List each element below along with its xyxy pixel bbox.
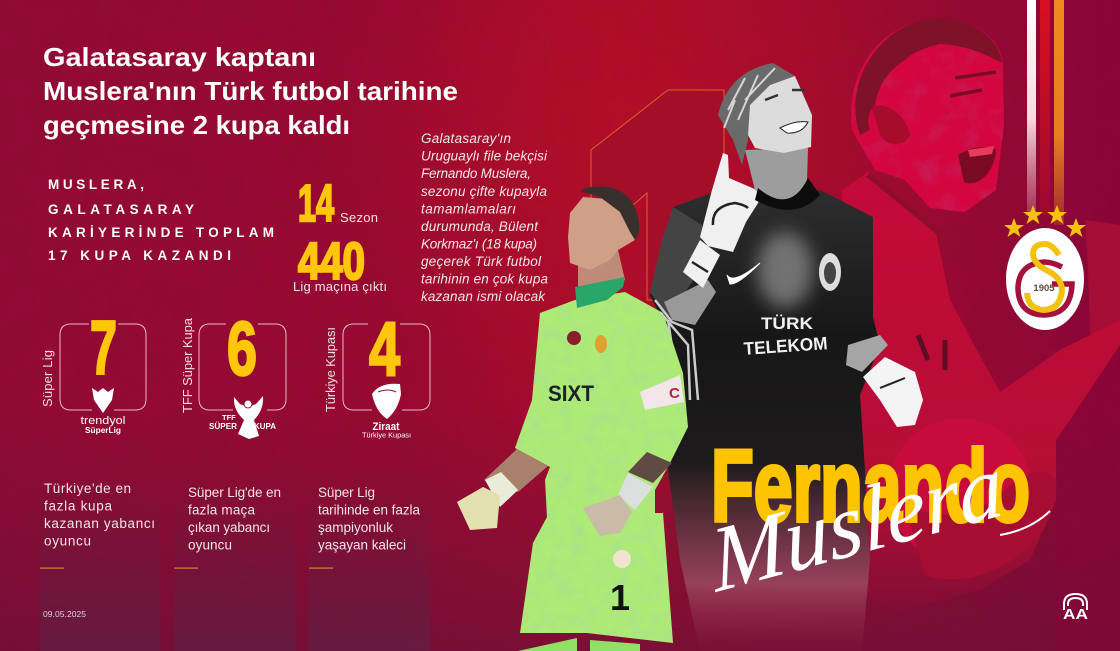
description: most championships: yaşayan kaleci <box>318 538 406 552</box>
collar <box>755 178 820 210</box>
description: most championships: şampiyonluk <box>318 520 393 535</box>
number 1: 1 <box>610 577 630 618</box>
description: most appearances: oyuncu <box>188 538 232 552</box>
crests <box>567 331 581 345</box>
hair highlights <box>724 68 775 128</box>
shirt marks <box>918 335 945 370</box>
black and white player <box>650 63 923 651</box>
description: most championships <box>318 485 420 552</box>
club crest on shirt <box>819 253 841 291</box>
galatasaray crest: 1905 <box>1033 283 1055 294</box>
description: most trophies <box>44 481 155 548</box>
galatasaray crest <box>1004 205 1086 330</box>
title: Muslera'nın Türk futbol tarihine <box>43 76 458 106</box>
hair <box>855 19 1002 135</box>
green player: C <box>669 385 680 402</box>
fist behind <box>1085 220 1120 335</box>
card: TFF Süper Kupa <box>180 307 286 439</box>
raised glove <box>683 153 760 288</box>
subheading: GALATASARAY <box>48 202 194 217</box>
smile <box>780 122 808 133</box>
intro paragraph: durumunda, Bülent <box>421 219 539 234</box>
right glove <box>583 495 632 536</box>
AA logo <box>1063 594 1088 623</box>
neck <box>745 148 808 205</box>
description: most trophies: oyuncu <box>44 534 91 548</box>
card: TFF Süper Kupa: TFF Süper Kupa <box>180 317 195 413</box>
left fist <box>457 487 500 530</box>
torso and arm <box>842 172 1120 610</box>
card: Süper Lig: 7 <box>90 306 117 391</box>
intro paragraph: tamamlamaları <box>421 202 516 216</box>
description: most trophies: Türkiye'de en <box>44 481 131 496</box>
intro paragraph: kazanan ismi olacak <box>421 289 546 304</box>
intro paragraph: Galatasaray'ın <box>421 131 511 146</box>
face <box>748 76 812 153</box>
logo: tff süper kupa: SÜPER <box>209 422 237 431</box>
card: Süper Lig: Süper Lig <box>40 350 55 407</box>
open mouth <box>958 147 996 183</box>
card: Türkiye Kupası: Türkiye Kupası <box>323 327 338 412</box>
AA logo: AA <box>1063 606 1088 623</box>
description: most trophies: kazanan yabancı <box>44 516 155 531</box>
stat: 14 seasons: Sezon <box>340 210 378 225</box>
logo: ziraat türkiye kupası: Türkiye Kupası <box>362 430 411 440</box>
neck <box>578 250 625 292</box>
subheading: 17 KUPA KAZANDI <box>48 248 231 263</box>
head shading <box>854 26 1003 211</box>
face <box>568 197 635 270</box>
kit <box>515 292 688 643</box>
sponsor: TELEKOM <box>743 333 828 359</box>
collar <box>575 277 625 308</box>
stat: 440 league matches: 440 <box>298 233 365 291</box>
intro paragraph: Korkmaz'ı (18 kupa) <box>421 236 537 252</box>
eyes <box>765 90 805 100</box>
stat: 14 seasons: 14 <box>298 175 334 233</box>
subheading: KARİYERİNDE TOPLAM <box>48 225 274 240</box>
glove detail <box>692 203 748 272</box>
left sleeve <box>650 207 702 318</box>
chest highlight <box>757 232 813 308</box>
green player <box>457 186 690 651</box>
intro paragraph <box>421 131 548 304</box>
stat: 440 league matches: Lig maçına çıktı <box>293 279 387 294</box>
captain armband <box>640 375 684 410</box>
ear <box>872 106 910 144</box>
description: most appearances: Süper Lig'de en <box>188 485 281 500</box>
description: most championships: Süper Lig <box>318 485 375 500</box>
subheading <box>48 177 274 263</box>
description: most appearances: fazla maça <box>188 502 255 518</box>
kit pattern <box>516 300 686 642</box>
ball <box>888 418 1032 562</box>
sleeve stripes <box>655 300 698 400</box>
sponsor: SIXT <box>548 381 595 406</box>
description: most appearances: çıkan yabancı <box>188 520 270 535</box>
left wristband <box>485 472 518 507</box>
head <box>851 19 1004 212</box>
logo: ziraat türkiye kupası <box>362 384 411 440</box>
card: TFF Süper Kupa: 6 <box>227 307 257 392</box>
right sleeve stripes <box>846 335 888 372</box>
left arm <box>484 449 548 492</box>
teeth <box>968 146 994 157</box>
logo: tff süper kupa <box>209 396 276 439</box>
logo: tff süper kupa: TFF <box>222 413 236 422</box>
nike swoosh <box>727 263 760 284</box>
white red orange stripes <box>1027 0 1064 225</box>
intro paragraph: Fernando Muslera, <box>421 166 531 181</box>
outline number 1 <box>591 90 724 300</box>
sponsor: TÜRK <box>761 314 814 333</box>
eye <box>950 72 996 96</box>
logo: trendyol süperlig <box>80 388 126 435</box>
card: Türkiye Kupası <box>323 307 430 440</box>
title <box>43 42 458 140</box>
description: most championships: tarihinde en fazla <box>318 502 420 518</box>
logo: tff süper kupa: KUPA <box>254 422 276 431</box>
title: Galatasaray kaptanı <box>43 42 316 72</box>
title: geçmesine 2 kupa kaldı <box>43 110 350 140</box>
name: Muslera script: Muslera <box>704 433 1008 612</box>
card: Türkiye Kupası: 4 <box>369 307 400 392</box>
description: most trophies: fazla kupa <box>44 498 112 514</box>
logo: trendyol süperlig: trendyol <box>80 415 126 427</box>
collar <box>868 175 938 232</box>
glove strap <box>880 378 905 388</box>
logo: ziraat türkiye kupası: Ziraat <box>372 421 400 433</box>
right forearm tattoo <box>628 452 672 483</box>
stars <box>1004 205 1086 237</box>
socks <box>518 638 640 651</box>
hair <box>580 186 639 240</box>
torso and shorts <box>650 188 880 651</box>
intro paragraph: tarihinin en çok kupa <box>421 272 548 286</box>
intro paragraph: Uruguaylı file bekçisi <box>421 148 548 164</box>
intro paragraph: sezonu çifte kupayla <box>421 184 547 199</box>
logo: trendyol süperlig: SüperLig <box>85 426 121 435</box>
date: 09.05.2025 <box>43 609 86 619</box>
glove <box>905 472 1056 580</box>
description: most appearances <box>188 485 281 552</box>
hair <box>718 63 795 165</box>
red tinted player <box>842 15 1120 610</box>
subheading: MUSLERA, <box>48 177 144 192</box>
right glove <box>863 357 923 427</box>
accent lines <box>40 568 333 569</box>
right wrist <box>618 473 653 510</box>
column panels <box>40 470 430 651</box>
intro paragraph: geçerek Türk futbol <box>421 254 542 269</box>
forearm <box>664 280 716 325</box>
sponsor <box>743 314 828 359</box>
card: Süper Lig <box>40 306 146 435</box>
